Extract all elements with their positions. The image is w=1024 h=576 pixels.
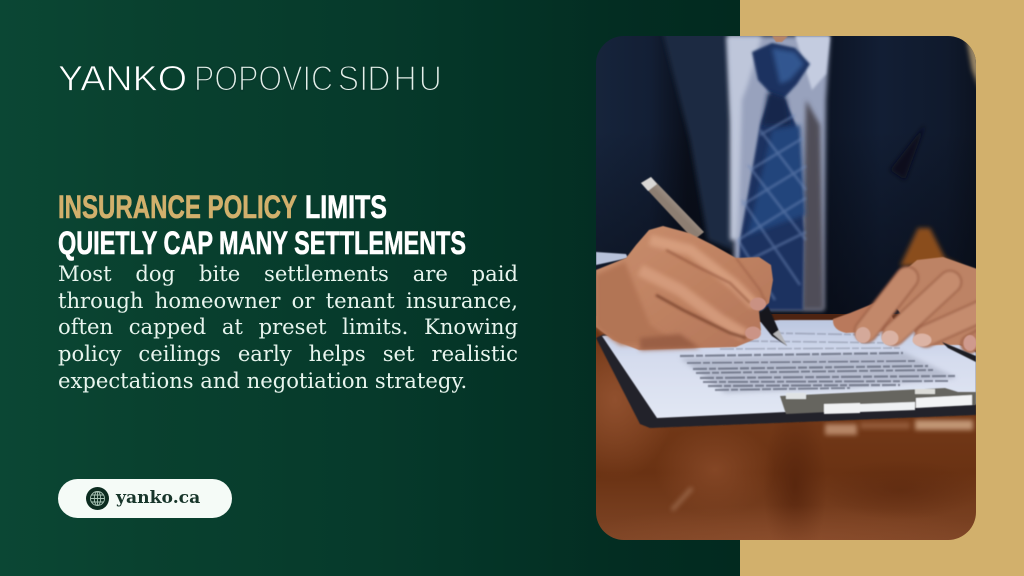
- heading: [58, 189, 466, 261]
- body text: often capped at preset limits. Knowing: [58, 314, 518, 339]
- icon: globe: [86, 487, 109, 510]
- necktie: [737, 43, 810, 310]
- shirt cuff: [596, 252, 628, 265]
- shirt and collar: [727, 36, 830, 310]
- body text: policy ceilings early helps set realistic: [58, 341, 518, 366]
- logo: Yanko Popovic Sidhu: SIDHU: [338, 59, 442, 99]
- logo: Yanko Popovic Sidhu: [58, 58, 442, 99]
- body text: expectations and negotiation strategy.: [58, 368, 467, 393]
- logo: Yanko Popovic Sidhu: POPOVIC: [194, 58, 333, 98]
- heading: INSURANCE POLICY: [58, 189, 297, 225]
- clipboard clip: [780, 388, 976, 414]
- document: [602, 320, 976, 418]
- photo: lawyer signing a document: [596, 36, 976, 540]
- writing hand: [596, 226, 773, 350]
- body text: Most dog bite settlements are paid: [58, 261, 518, 286]
- website text: yanko.ca: [116, 488, 200, 508]
- resting hand: [832, 256, 976, 362]
- heading: LIMITS: [305, 189, 387, 225]
- suit jacket: [596, 30, 980, 336]
- website pill: [58, 479, 232, 518]
- clipboard: [596, 334, 976, 428]
- table: [596, 314, 976, 540]
- orange background patch: [900, 228, 962, 266]
- gold side panel: [740, 0, 1024, 576]
- pen: [641, 177, 787, 346]
- logo: Yanko Popovic Sidhu: YANKO: [58, 58, 187, 98]
- body text: through homeowner or tenant insurance,: [58, 288, 518, 313]
- body text: [58, 261, 518, 393]
